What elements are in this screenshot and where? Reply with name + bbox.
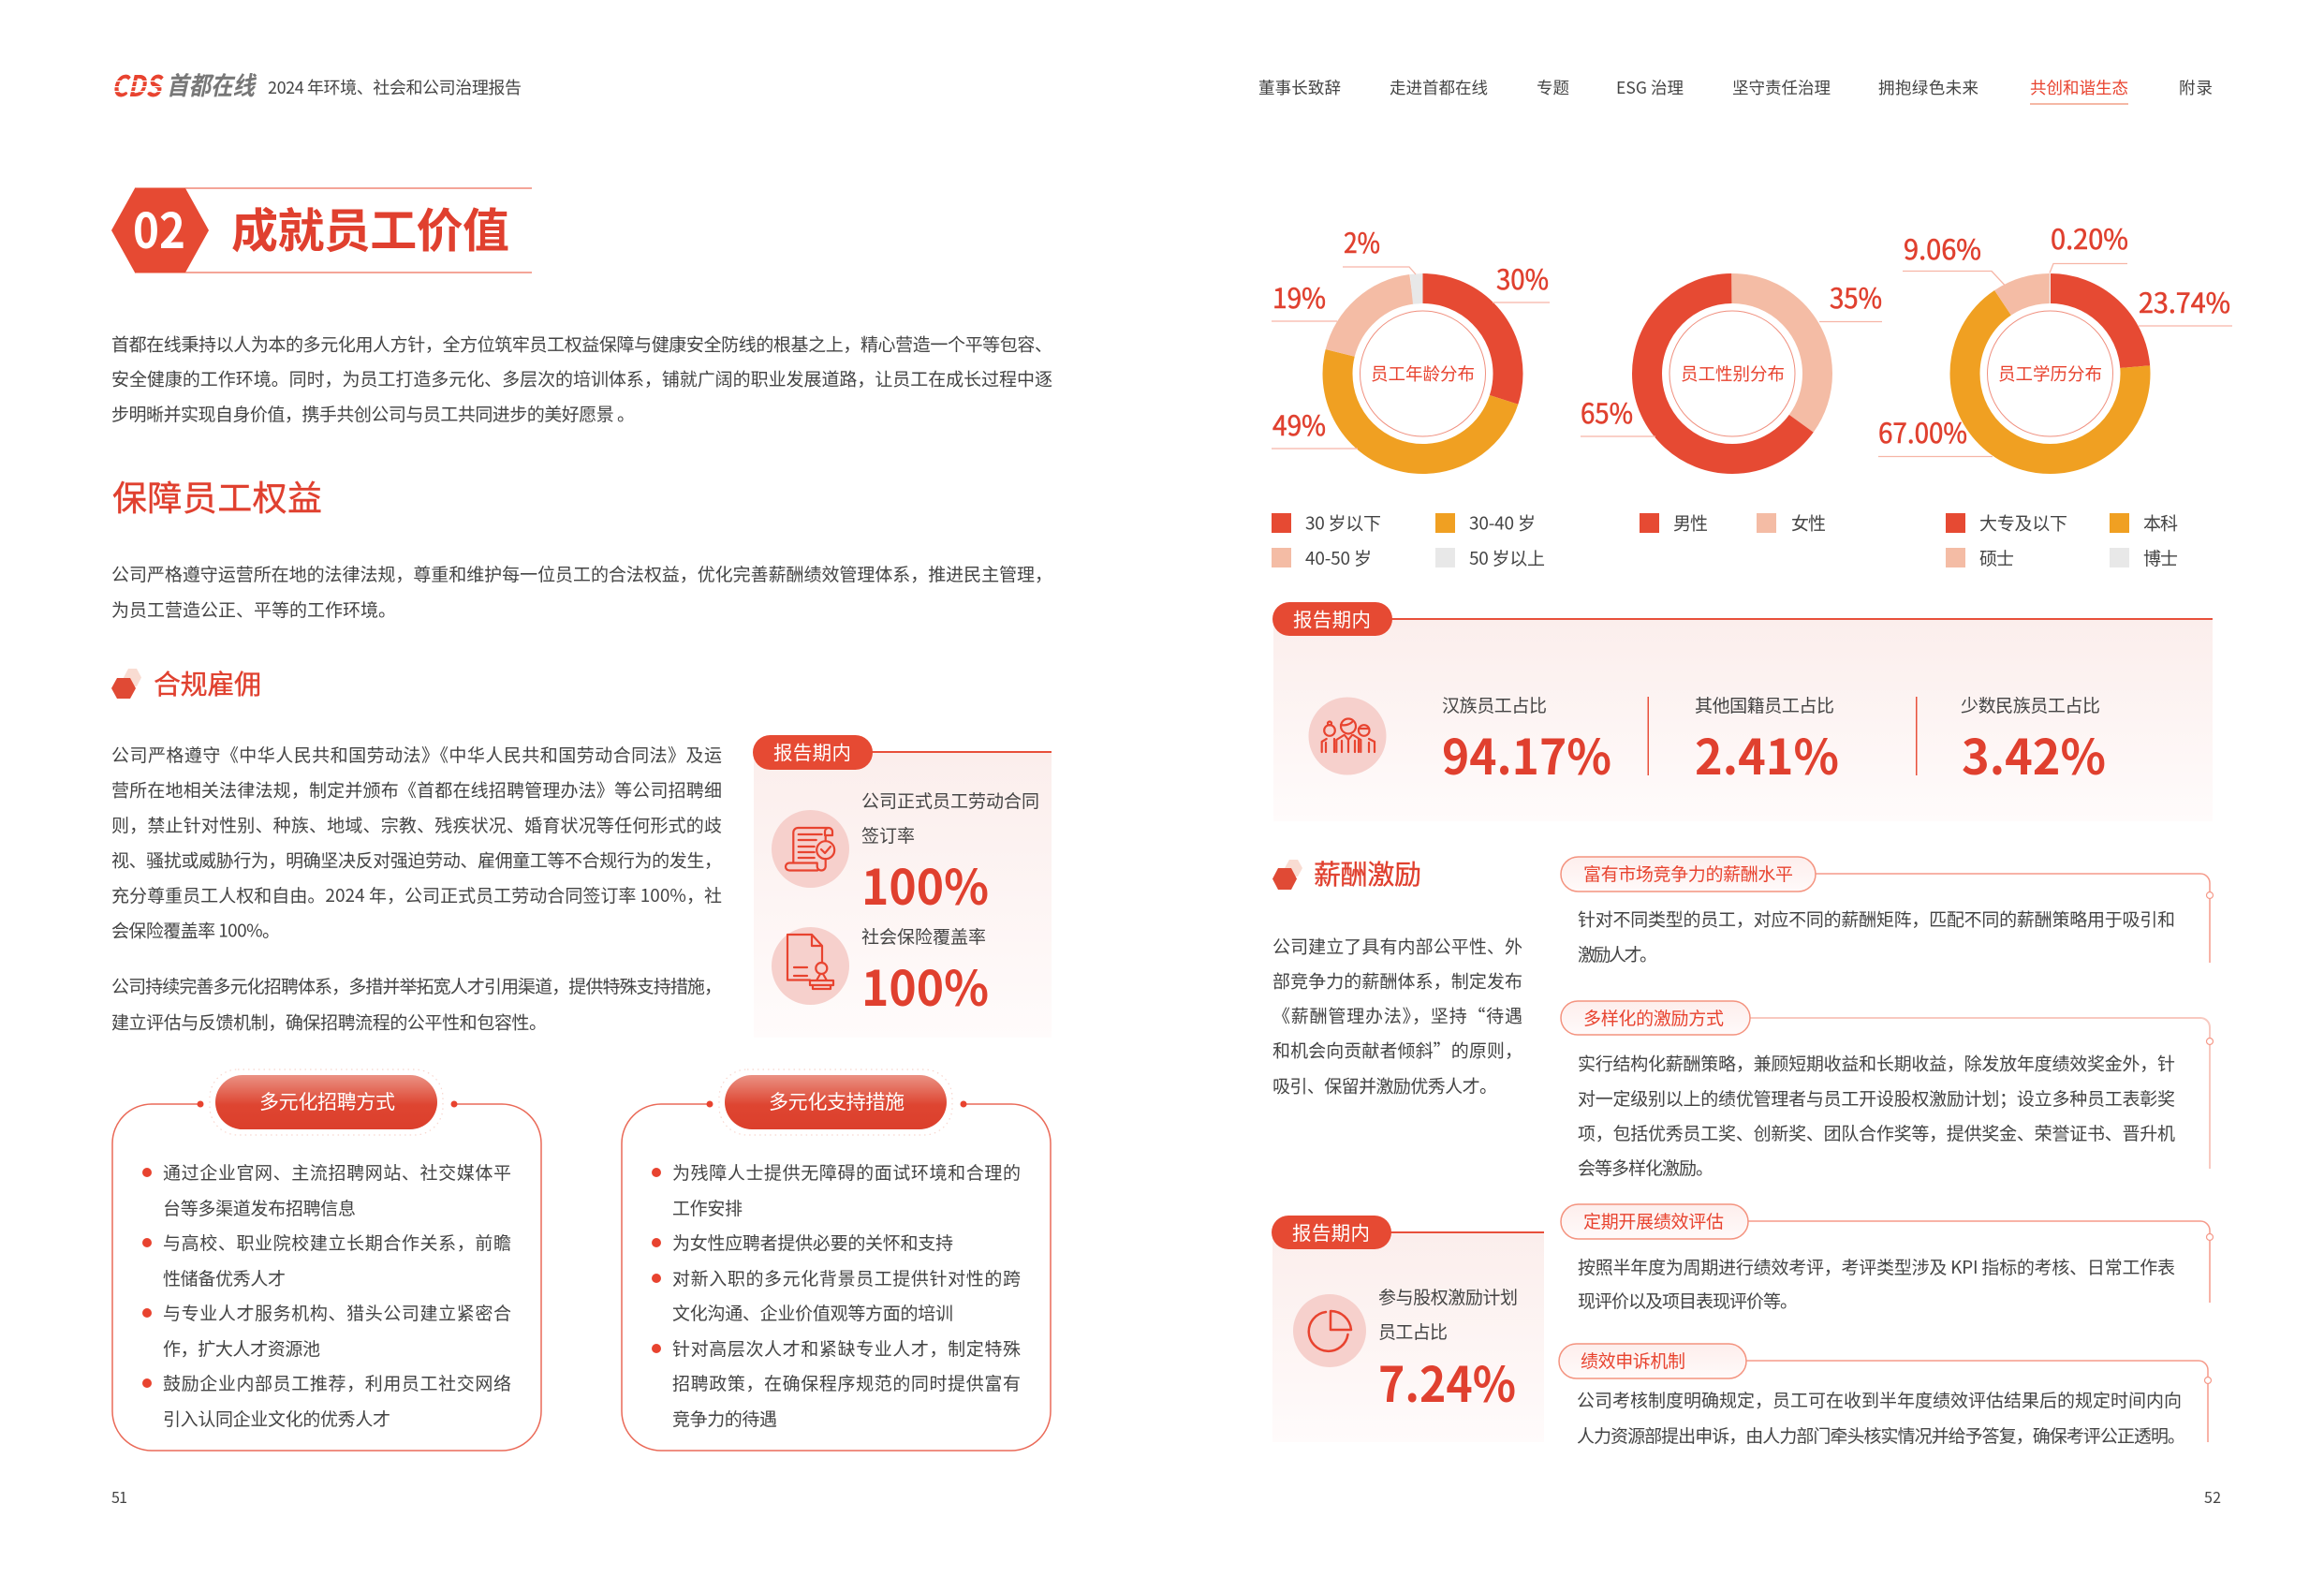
stat: ethnic minorities: 少数民族员工占比 [1961,692,2100,717]
equity value: 7.24% [1378,1346,1516,1416]
stat: ethnic minorities: 3.42% [1962,718,2106,788]
pill heading: 多元化招聘方式 [259,1087,395,1115]
compensation paragraph: 吸引、保留并激励优秀人才。 [1272,1073,1497,1098]
icon: document with stamp [772,927,849,1005]
value labels: 9.06% [1904,228,1981,268]
chart: age donut: 员工年龄分布 [1371,361,1475,386]
legend: gender: 男性 [1673,509,1708,536]
bullet list: 招聘政策，在确保程序规范的同时提供富有 [672,1370,1021,1395]
legend: age: 50 岁以上 [1469,545,1545,570]
logo: 首都在线 [167,66,257,102]
legend: age: 30 岁以下 [1305,509,1381,536]
logo: CDS [111,63,164,105]
block: appeal mechanism: 绩效申诉机制 [1581,1348,1685,1373]
compliant hiring paragraphs [111,742,722,1034]
icon: signed contract scroll [772,810,849,888]
contract rate value: 100% [861,848,989,919]
bullet list: 与高校、职业院校建立长期合作关系，前瞻 [163,1230,511,1255]
navigation [1258,76,2213,105]
legend: age [1272,509,1545,570]
legend: gender [1640,509,1826,536]
header left: logo and report name [110,63,522,105]
insurance label: 社会保险覆盖率 [861,923,986,949]
value labels: 0.20% [2051,218,2128,258]
bullet list: 性储备优秀人才 [163,1265,286,1290]
compliant hiring paragraphs: 充分尊重员工人权和自由。2024 年，公司正式员工劳动合同签订率 100%，社 [111,882,722,907]
compliant hiring paragraphs: 营所在地相关法律法规，制定并颁布《首都在线招聘管理办法》等公司招聘细 [111,777,722,802]
panel: diversified support [622,1069,1051,1451]
block: diversified incentives: 实行结构化薪酬策略，兼顾短期收益和长期收益，除发放年度绩效奖金外，针 [1578,1051,2175,1075]
compliant hiring paragraphs: 建立评估与反馈机制，确保招聘流程的公平性和包容性。 [111,1010,547,1034]
pill label [753,735,873,770]
panel: reporting period equity [1272,1216,1544,1442]
subheading: compliant hiring: 合规雇佣 [154,663,261,702]
block: competitive pay: 富有市场竞争力的薪酬水平 [1583,861,1793,886]
subheading: compensation incentives: 薪酬激励 [1314,853,1421,892]
bullet list: 通过企业官网、主流招聘网站、社交媒体平 [163,1159,511,1185]
legend: education: 本科 [2143,509,2178,536]
compensation paragraph [1272,933,1522,1098]
contract rate label: 公司正式员工劳动合同 [861,788,1039,813]
pill heading: 多元化支持措施 [769,1087,905,1115]
block: regular performance review: 定期开展绩效评估 [1583,1208,1724,1233]
icon: employees group [1309,697,1386,775]
value labels [1581,277,1882,436]
equity label [1378,1284,1518,1344]
logo [110,63,257,105]
value labels: 30% [1496,258,1549,298]
legend: gender: 女性 [1791,509,1826,536]
value labels: 2% [1344,222,1380,261]
page number 52: 52 [2204,1485,2221,1508]
heading: protect employee rights: 保障员工权益 [112,470,322,521]
chart: education donut: 员工学历分布 [1998,361,2102,386]
navigation: 走进首都在线 [1390,76,1488,99]
block: appeal mechanism [1559,1344,2212,1448]
chart: gender donut [1581,277,1882,459]
section title: 02 [133,192,185,262]
block: diversified incentives: 多样化的激励方式 [1583,1005,1724,1030]
stat: other nationalities: 其他国籍员工占比 [1695,692,1834,717]
section title [111,187,532,273]
bullet list [142,1159,511,1431]
block: regular performance review [1561,1204,2214,1313]
compensation paragraph: 部竞争力的薪酬体系，制定发布 [1272,968,1522,993]
intro paragraph: 首都在线秉持以人为本的多元化用人方针，全方位筑牢员工权益保障与健康安全防线的根基之上，精心营造一个平等包容、 [111,332,1052,356]
navigation: 坚守责任治理 [1732,76,1831,99]
intro paragraph [111,332,1052,426]
navigation: 董事长致辞 [1258,76,1341,99]
chart: age donut [1272,222,1550,459]
rights paragraph: 公司严格遵守运营所在地的法律法规，尊重和维护每一位员工的合法权益，优化完善薪酬绩效管理体系，推进民主管理， [111,561,1052,586]
value labels: 35% [1830,277,1882,317]
bullet list: 对新入职的多元化背景员工提供针对性的跨 [672,1265,1021,1290]
panel: diversified recruitment [112,1069,541,1451]
rights paragraph: 为员工营造公正、平等的工作环境。 [111,597,396,622]
intro paragraph: 安全健康的工作环境。同时，为员工打造多元化、多层次的培训体系，铺就广阔的职业发展道路，让员工在成长过程中逐 [111,365,1052,391]
block: appeal mechanism: 公司考核制度明确规定，员工可在收到半年度绩效评估结果后的规定时间内向 [1577,1387,2182,1412]
panel: reporting period ethnicity [1272,602,2213,821]
bullet list: 引入认同企业文化的优秀人才 [163,1406,390,1431]
navigation: 附录 [2179,76,2213,99]
bullet list: 针对高层次人才和紧缺专业人才，制定特殊 [672,1335,1021,1361]
navigation: 拥抱绿色未来 [1878,76,1978,99]
compensation paragraph: 公司建立了具有内部公平性、外 [1272,933,1522,959]
navigation: 专题 [1537,76,1569,99]
report name: 2024 年环境、社会和公司治理报告 [268,75,522,99]
legend: education: 硕士 [1979,545,2014,570]
legend: age: 40-50 岁 [1305,545,1372,570]
block: diversified incentives: 对一定级别以上的绩优管理者与员工开设股权激励计划；设立多种员工表彰奖 [1578,1085,2175,1111]
equity label: 参与股权激励计划 [1378,1284,1518,1309]
compliant hiring paragraphs: 会保险覆盖率 100%。 [111,918,280,942]
rights paragraph [111,561,1052,622]
bullet list: 竞争力的待遇 [672,1406,777,1431]
value labels: 67.00% [1878,412,1967,451]
compensation paragraph: 和机会向贡献者倾斜”的原则， [1272,1038,1522,1062]
legend: education [1946,509,2178,570]
bullet list: 台等多渠道发布招聘信息 [163,1195,356,1220]
bullet list: 与专业人才服务机构、猎头公司建立紧密合 [163,1300,511,1325]
value labels: 23.74% [2139,282,2230,321]
navigation: 共创和谐生态 [2030,76,2128,99]
icon: pie chart [1293,1294,1366,1367]
legend: education: 大专及以下 [1979,509,2067,536]
block: diversified incentives: 项，包括优秀员工奖、创新奖、团队合作奖等，提供奖金、荣誉证书、晋升机 [1578,1120,2175,1145]
equity label: 员工占比 [1378,1319,1448,1344]
bullet list: 鼓励企业内部员工推荐，利用员工社交网络 [163,1370,511,1395]
compliant hiring paragraphs: 则，禁止针对性别、种族、地域、宗教、残疾状况、婚育状况等任何形式的歧 [111,812,722,837]
pill label: 报告期内 [1293,604,1371,632]
bullet list: 为女性应聘者提供必要的关怀和支持 [672,1230,953,1255]
pill label: 报告期内 [1292,1217,1370,1245]
value labels: 19% [1272,277,1326,317]
pill label: 报告期内 [773,737,851,765]
compensation paragraph: 《薪酬管理办法》，坚持“待遇 [1272,1002,1522,1028]
section title: 成就员工价值 [231,194,509,261]
bullet list: 工作安排 [672,1195,743,1220]
block: regular performance review: 现评价以及项目表现评价等。 [1578,1288,1798,1313]
stat: Han: 94.17% [1442,718,1611,788]
block: regular performance review: 按照半年度为周期进行绩效考评，考评类型涉及 KPI 指标的考核、日常工作表 [1578,1254,2175,1279]
legend: education: 博士 [2143,545,2178,570]
value labels [1878,218,2232,457]
legend: age: 30-40 岁 [1469,509,1536,536]
bullet list: 作，扩大人才资源池 [163,1335,320,1361]
block: competitive pay [1561,857,2214,966]
pill heading [210,1069,443,1135]
page number 51: 51 [111,1485,127,1508]
value labels: 49% [1272,405,1326,444]
bullet list [652,1159,1021,1431]
stat: other nationalities: 2.41% [1695,718,1839,788]
stat: Han: 汉族员工占比 [1442,692,1547,717]
insurance value: 100% [861,950,989,1020]
block: diversified incentives [1561,1001,2214,1180]
pill label [1272,602,1392,636]
chart: education donut [1878,218,2232,459]
block: competitive pay: 激励人才。 [1578,941,1657,966]
navigation: ESG 治理 [1616,76,1684,99]
panel: reporting period contract and insurance [753,735,1052,1038]
bullet list: 文化沟通、企业价值观等方面的培训 [672,1300,953,1325]
block: appeal mechanism: 人力资源部提出申诉，由人力部门牵头核实情况并给予答复，确保考评公正透明。 [1577,1422,2185,1448]
contract rate label [861,788,1039,847]
chart: gender donut: 员工性别分布 [1681,361,1785,386]
value labels [1272,222,1550,449]
compliant hiring paragraphs: 公司严格遵守《中华人民共和国劳动法》《中华人民共和国劳动合同法》及运 [111,742,722,767]
block: diversified incentives: 会等多样化激励。 [1578,1155,1714,1180]
intro paragraph: 步明晰并实现自身价值，携手共创公司与员工共同进步的美好愿景 。 [111,401,635,426]
bullet list: 为残障人士提供无障碍的面试环境和合理的 [672,1159,1021,1185]
value labels: 65% [1581,392,1633,432]
contract rate label: 签订率 [861,822,915,847]
pill heading [719,1069,952,1135]
compliant hiring paragraphs: 公司持续完善多元化招聘体系，多措并举拓宽人才引用渠道，提供特殊支持措施， [111,973,722,998]
block: competitive pay: 针对不同类型的员工，对应不同的薪酬矩阵，匹配不同的薪酬策略用于吸引和 [1578,906,2175,931]
compliant hiring paragraphs: 视、骚扰或威胁行为，明确坚决反对强迫劳动、雇佣童工等不合规行为的发生， [111,847,722,873]
pill label [1272,1216,1391,1249]
